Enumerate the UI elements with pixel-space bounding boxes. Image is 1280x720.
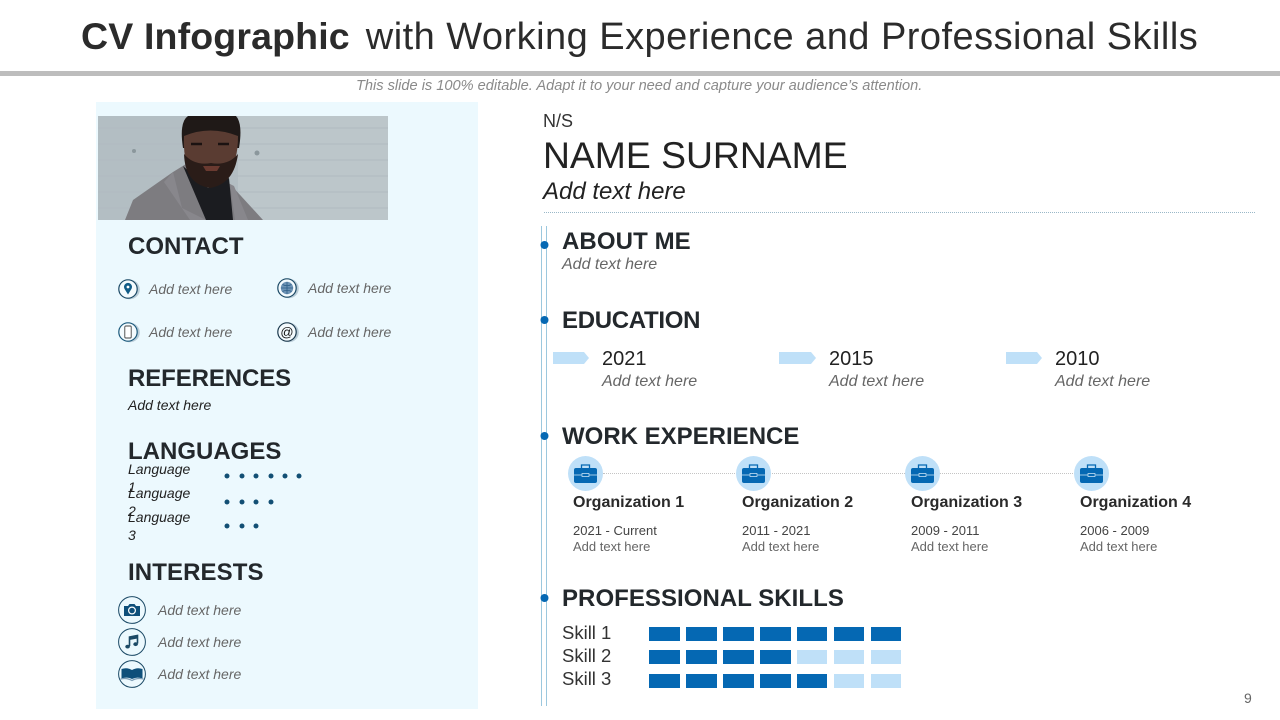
contact item: email (277, 322, 391, 342)
skill bar (649, 650, 901, 664)
contact text: Add text here (149, 324, 232, 340)
jacket (125, 164, 263, 220)
language 3 rating (224, 524, 258, 528)
turtleneck (183, 166, 233, 220)
icon: location pin (118, 279, 140, 300)
icon: briefcase (736, 456, 771, 491)
references text: Add text here (128, 397, 211, 413)
title rule (0, 71, 1280, 76)
arrow tag (1006, 352, 1042, 364)
icon: at sign: @ (280, 324, 294, 340)
interest text: Add text here (158, 666, 241, 682)
tagline: Add text here (543, 178, 686, 205)
heading: languages: LANGUAGES (128, 438, 281, 465)
work connector line (603, 473, 1075, 474)
lapels (164, 172, 206, 220)
dates: 2011 - 2021 (742, 523, 810, 538)
heading: work experience: WORK EXPERIENCE (562, 423, 799, 450)
organization 4 (1074, 456, 1192, 554)
interest item: photography (118, 596, 241, 624)
contact item: location (118, 279, 232, 300)
heading: professional skills: PROFESSIONAL SKILLS (562, 585, 844, 612)
dates: 2009 - 2011 (911, 523, 979, 538)
organization 3 (905, 456, 1022, 554)
heading: references: REFERENCES (128, 365, 291, 392)
initials: N/S (543, 111, 573, 131)
icon: briefcase (905, 456, 940, 491)
dates: 2006 - 2009 (1080, 523, 1149, 538)
timeline (540, 226, 548, 706)
beard (184, 154, 238, 188)
icon: open book (118, 660, 146, 688)
face (184, 130, 238, 177)
skill bar (649, 627, 901, 641)
icon: camera (118, 596, 146, 624)
education item 2010 (1006, 348, 1150, 390)
photo (98, 116, 388, 220)
heading: interests: INTERESTS (128, 559, 264, 586)
skill label: Skill 2 (562, 645, 611, 666)
skill 1 (562, 622, 901, 643)
hair (182, 116, 240, 148)
skill bar (649, 674, 901, 688)
organization name: Organization 2 (742, 494, 853, 511)
interest text: Add text here (158, 602, 241, 618)
icon: music notes (118, 628, 146, 656)
contact text: Add text here (308, 324, 391, 340)
year: 2021 (602, 348, 646, 370)
skill label: Skill 3 (562, 668, 611, 689)
organization text: Add text here (1080, 539, 1157, 554)
year: 2010 (1055, 348, 1100, 370)
interest text: Add text here (158, 634, 241, 650)
name: NAME SURNAME (543, 134, 848, 176)
icon: globe (277, 278, 299, 298)
icon: briefcase (1074, 456, 1109, 491)
skill 3 (562, 668, 901, 689)
panel: left sidebar (96, 102, 478, 709)
organization 1 (568, 456, 684, 554)
title: CV Infographic with Working Experience and Professional Skills (81, 15, 1198, 58)
education item 2021 (553, 348, 697, 390)
language 2 rating (224, 500, 274, 504)
education text: Add text here (1055, 373, 1150, 390)
organization text: Add text here (911, 539, 988, 554)
language 3 label: Language 3 (128, 509, 190, 543)
language 2 label: Language 2 (128, 485, 190, 519)
skill 2 (562, 645, 901, 666)
organization 2 (736, 456, 853, 554)
language 1 label: Language 1 (128, 461, 190, 495)
arrow tag (779, 352, 816, 364)
dates: 2021 - Current (573, 523, 657, 538)
organization name: Organization 1 (573, 494, 684, 511)
heading: contact: CONTACT (128, 233, 244, 260)
icon: at sign (277, 322, 299, 342)
about text: Add text here (562, 256, 657, 273)
page number: 9 (1244, 690, 1252, 706)
organization text: Add text here (742, 539, 819, 554)
subtitle: This slide is 100% editable. Adapt it to your need and capture your audience’s attention. (356, 78, 922, 94)
header divider (544, 212, 1255, 213)
heading: about me: ABOUT ME (562, 228, 691, 255)
skill label: Skill 1 (562, 622, 611, 643)
year: 2015 (829, 348, 874, 370)
interest item: music (118, 628, 241, 656)
arrow tag (553, 352, 589, 364)
contact text: Add text here (308, 280, 391, 296)
education text: Add text here (829, 373, 924, 390)
contact item: web (277, 278, 391, 298)
education item 2015 (779, 348, 924, 390)
icon: phone (118, 322, 140, 342)
organization text: Add text here (573, 539, 650, 554)
contact item: phone (118, 322, 232, 342)
language 1 rating (224, 474, 302, 478)
interest item: reading (118, 660, 241, 688)
organization name: Organization 3 (911, 494, 1022, 511)
organization name: Organization 4 (1080, 494, 1191, 511)
heading: education: EDUCATION (562, 307, 700, 334)
contact text: Add text here (149, 281, 232, 297)
education text: Add text here (602, 373, 697, 390)
icon: briefcase (568, 456, 603, 491)
